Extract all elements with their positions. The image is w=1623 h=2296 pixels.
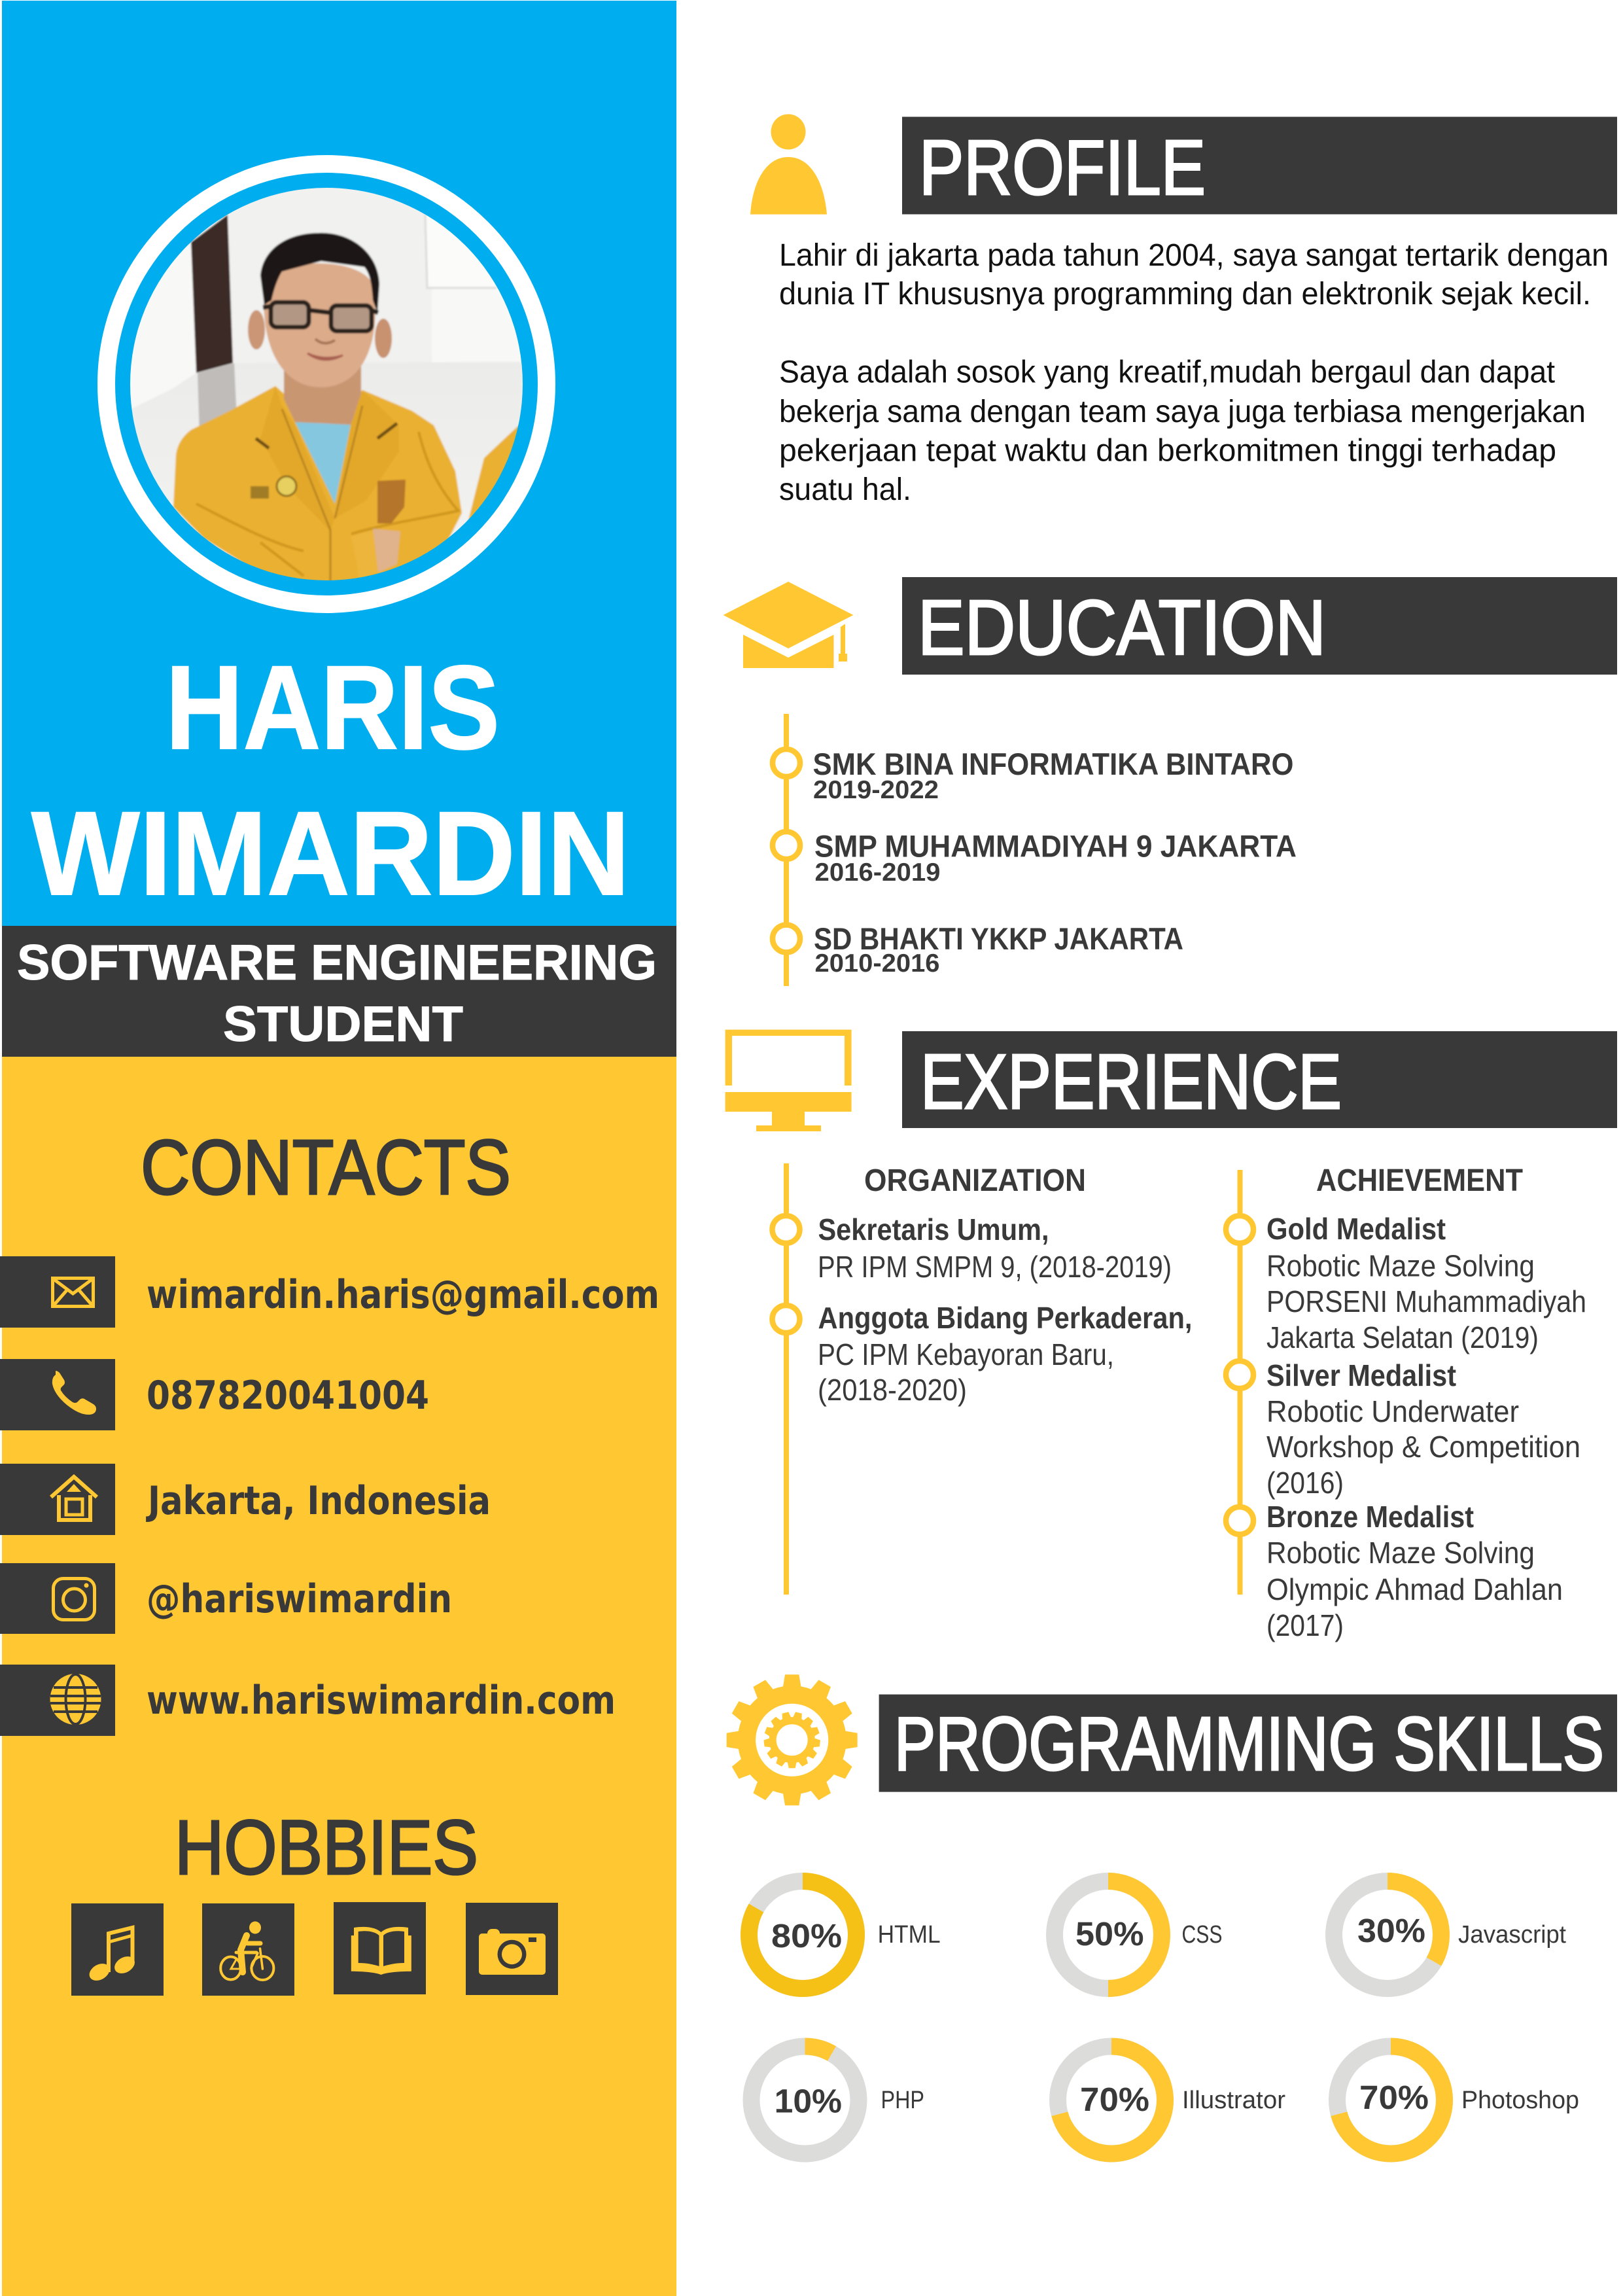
heading: hobbies: HOBBIES bbox=[175, 1805, 478, 1891]
education item 3 bbox=[814, 921, 1183, 978]
donut chart: Illustrator 70%: 70% bbox=[1080, 2081, 1149, 2118]
icon: monitor bbox=[725, 1030, 852, 1131]
column: achievement: Jakarta Selatan (2019) bbox=[1266, 1320, 1539, 1354]
contact: email: wimardin.haris@gmail.com bbox=[147, 1272, 659, 1318]
column: organization: (2018-2020) bbox=[818, 1373, 967, 1407]
contact: email bbox=[0, 1256, 659, 1328]
timeline: organization bbox=[772, 1163, 799, 1595]
profile photo ring bbox=[106, 164, 547, 605]
icon: camera bbox=[466, 1903, 558, 1995]
contact: instagram: @hariswimardin bbox=[147, 1576, 452, 1622]
icon: music bbox=[71, 1903, 164, 1996]
heading: education bbox=[902, 577, 1617, 675]
column: organization: PR IPM SMPM 9, (2018-2019) bbox=[818, 1250, 1172, 1284]
donut chart: Illustrator 70% bbox=[1058, 2047, 1285, 2154]
panel: yellow contact background bbox=[2, 1056, 676, 2296]
icon: globe bbox=[0, 1665, 115, 1736]
donut chart: Photoshop 70% bbox=[1337, 2047, 1579, 2154]
column: organization: Anggota Bidang Perkaderan, bbox=[818, 1301, 1192, 1335]
icon: graduation cap bbox=[724, 582, 853, 668]
column: organization: ORGANIZATION bbox=[864, 1163, 1086, 1198]
icon: person bbox=[750, 114, 827, 215]
donut chart: HTML 80%: 80% bbox=[771, 1917, 842, 1954]
contact: website bbox=[0, 1665, 616, 1736]
section: experience bbox=[725, 1030, 1617, 1642]
column: achievement: (2017) bbox=[1266, 1608, 1344, 1642]
job title: STUDENT bbox=[223, 997, 463, 1052]
text: profile description: bekerja sama dengan team saya juga terbiasa mengerjakan bbox=[779, 395, 1586, 429]
column: achievement: PORSENI Muhammadiyah bbox=[1266, 1284, 1586, 1318]
section: programming skills bbox=[727, 1674, 1617, 2154]
section: profile bbox=[750, 114, 1617, 507]
panel: left sidebar bbox=[0, 1, 676, 2296]
education item 1: SMK BINA INFORMATIKA BINTARO bbox=[812, 747, 1294, 781]
name: WIMARDIN bbox=[31, 786, 630, 920]
column: achievement: Gold Medalist bbox=[1266, 1212, 1446, 1246]
column: achievement: Silver Medalist bbox=[1266, 1358, 1456, 1392]
donut chart: Javascript 30%: Javascript bbox=[1458, 1921, 1566, 1949]
heading: profile bbox=[902, 116, 1617, 215]
job title: SOFTWARE ENGINEERING bbox=[17, 935, 657, 991]
timeline: achievement bbox=[1226, 1170, 1253, 1595]
contact: phone: 087820041004 bbox=[147, 1373, 429, 1419]
column: achievement: Bronze Medalist bbox=[1266, 1500, 1474, 1534]
education item 3: SD BHAKTI YKKP JAKARTA bbox=[814, 921, 1183, 956]
icon: open book bbox=[334, 1902, 426, 1994]
text: profile description bbox=[779, 238, 1609, 507]
donut chart: Photoshop 70%: 70% bbox=[1359, 2079, 1429, 2116]
contact: phone bbox=[0, 1359, 429, 1430]
education item 1: 2019-2022 bbox=[813, 776, 939, 804]
icon: instagram bbox=[0, 1563, 115, 1634]
heading: experience: EXPERIENCE bbox=[920, 1038, 1342, 1125]
donut chart: PHP 10%: PHP bbox=[881, 2087, 924, 2114]
contact: instagram bbox=[0, 1563, 452, 1634]
name: HARIS bbox=[166, 641, 500, 774]
column: achievement: Robotic Maze Solving bbox=[1266, 1248, 1535, 1282]
donut chart: CSS 50%: 50% bbox=[1075, 1915, 1143, 1952]
profile photo portrait bbox=[124, 183, 530, 589]
column: achievement: Robotic Maze Solving bbox=[1266, 1536, 1535, 1570]
text: profile description: Lahir di jakarta pada tahun 2004, saya sangat tertarik dengan bbox=[779, 238, 1609, 273]
education item 1 bbox=[812, 747, 1294, 804]
heading: profile: PROFILE bbox=[919, 124, 1206, 211]
column: achievement: (2016) bbox=[1266, 1466, 1344, 1500]
donut chart: Illustrator 70%: Illustrator bbox=[1182, 2087, 1285, 2114]
text: profile description: Saya adalah sosok yang kreatif,mudah bergaul dan dapat bbox=[779, 355, 1555, 390]
donut chart: Photoshop 70%: Photoshop bbox=[1461, 2087, 1579, 2114]
text: profile description: pekerjaan tepat waktu dan berkomitmen tinggi terhadap bbox=[779, 433, 1556, 468]
donut chart: Javascript 30%: 30% bbox=[1357, 1912, 1425, 1949]
contact: website: www.hariswimardin.com bbox=[147, 1678, 616, 1723]
column: achievement: ACHIEVEMENT bbox=[1316, 1163, 1523, 1198]
donut chart: HTML 80% bbox=[749, 1881, 941, 1988]
icon: envelope bbox=[0, 1256, 115, 1328]
icon: house bbox=[0, 1464, 115, 1535]
donut chart: PHP 10% bbox=[751, 2047, 924, 2154]
text: profile description: suatu hal. bbox=[779, 472, 911, 507]
text: profile description: dunia IT khususnya programming dan elektronik sejak kecil. bbox=[779, 277, 1591, 311]
column: organization: PC IPM Kebayoran Baru, bbox=[818, 1337, 1114, 1371]
education item 2: SMP MUHAMMADIYAH 9 JAKARTA bbox=[814, 828, 1297, 864]
column: achievement: Robotic Underwater bbox=[1266, 1394, 1519, 1428]
column: achievement: Workshop & Competition bbox=[1266, 1430, 1580, 1464]
icon: gear bbox=[727, 1674, 858, 1805]
donut chart: Javascript 30% bbox=[1334, 1881, 1566, 1988]
column: achievement: Olympic Ahmad Dahlan bbox=[1266, 1572, 1563, 1606]
donut chart: CSS 50% bbox=[1055, 1881, 1222, 1988]
heading: education: EDUCATION bbox=[918, 584, 1326, 671]
donut chart: PHP 10%: 10% bbox=[775, 2083, 842, 2120]
column: organization: Sekretaris Umum, bbox=[818, 1212, 1049, 1246]
donut chart: HTML 80%: HTML bbox=[878, 1921, 941, 1949]
timeline: education bbox=[773, 714, 800, 986]
icon: cyclist bbox=[202, 1903, 294, 1996]
heading: experience bbox=[902, 1031, 1617, 1128]
column: achievement bbox=[1266, 1163, 1586, 1642]
panel: blue header background bbox=[2, 1, 676, 927]
column: organization bbox=[818, 1163, 1192, 1407]
contact: address bbox=[0, 1464, 491, 1535]
name bbox=[31, 641, 630, 920]
panel: job title band bbox=[2, 926, 676, 1057]
education item 3: 2010-2016 bbox=[815, 949, 939, 978]
job title bbox=[17, 935, 657, 1052]
contact: address: Jakarta, Indonesia bbox=[146, 1478, 491, 1524]
education item 2 bbox=[814, 828, 1297, 887]
section: education bbox=[724, 577, 1617, 986]
icon: phone bbox=[0, 1359, 115, 1430]
donut chart: CSS 50%: CSS bbox=[1181, 1921, 1222, 1949]
heading: contacts: CONTACTS bbox=[141, 1124, 511, 1211]
education item 2: 2016-2019 bbox=[815, 858, 941, 887]
